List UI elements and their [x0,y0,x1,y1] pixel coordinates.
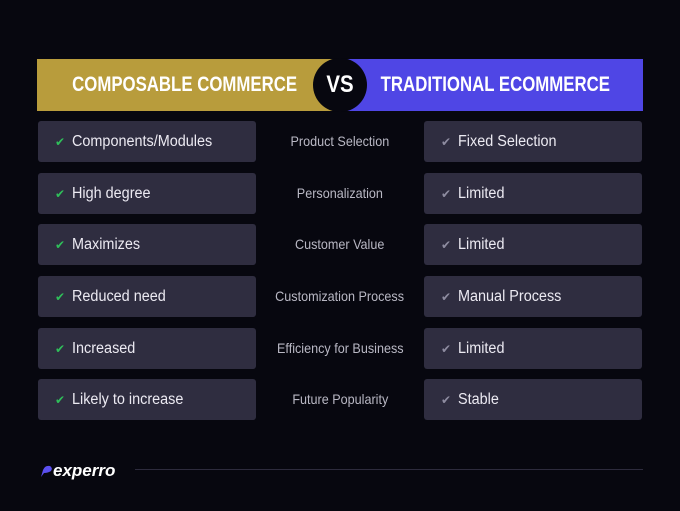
row 6: ✔ [55,392,65,406]
row 5: ✔ [55,342,65,356]
row 2: Limited [458,184,504,202]
row 3: Customer Value [295,236,385,252]
row 6 [38,379,642,420]
row 3 [38,224,642,265]
row 3: Limited [458,236,504,252]
banner: composable commerce: COMPOSABLE COMMERCE [73,73,297,96]
row 3: ✔ [441,238,451,252]
row 5: Increased [72,340,135,356]
row 4 [38,276,642,317]
row 4: Customization Process [276,288,404,304]
row 1: Product Selection [291,133,389,149]
row 1: ✔ [441,134,451,148]
row 5: Limited [458,340,504,356]
row 4: Reduced need [72,288,166,304]
row 2 [38,173,642,214]
row 6: Likely to increase [72,390,183,408]
banner: traditional ecommerce [347,59,643,111]
vs badge [313,58,367,112]
banner: composable commerce [37,59,335,111]
row 4: Manual Process [458,288,561,304]
row 5: Efficiency for Business [277,340,403,356]
row 4: ✔ [55,290,65,304]
row 1: Fixed Selection [458,132,557,150]
row 1: Components/Modules [72,132,212,150]
banner: traditional ecommerce: TRADITIONAL ECOMMERCE [380,73,610,96]
row 6: Stable [458,390,499,408]
row 6: ✔ [441,392,451,406]
logo: experro: experro [53,461,115,480]
row 2: ✔ [441,186,451,200]
row 2: ✔ [55,186,65,200]
row 4: ✔ [441,290,451,304]
row 3: ✔ [55,238,65,252]
vs badge: VS [326,71,354,98]
row 1: ✔ [55,134,65,148]
row 2: High degree [72,184,151,202]
row 5: ✔ [441,342,451,356]
row 1 [38,121,642,162]
row 6: Future Popularity [292,391,388,407]
row 2: Personalization [297,185,383,201]
row 3: Maximizes [72,236,140,252]
row 5 [38,328,642,369]
footer line [135,469,643,470]
